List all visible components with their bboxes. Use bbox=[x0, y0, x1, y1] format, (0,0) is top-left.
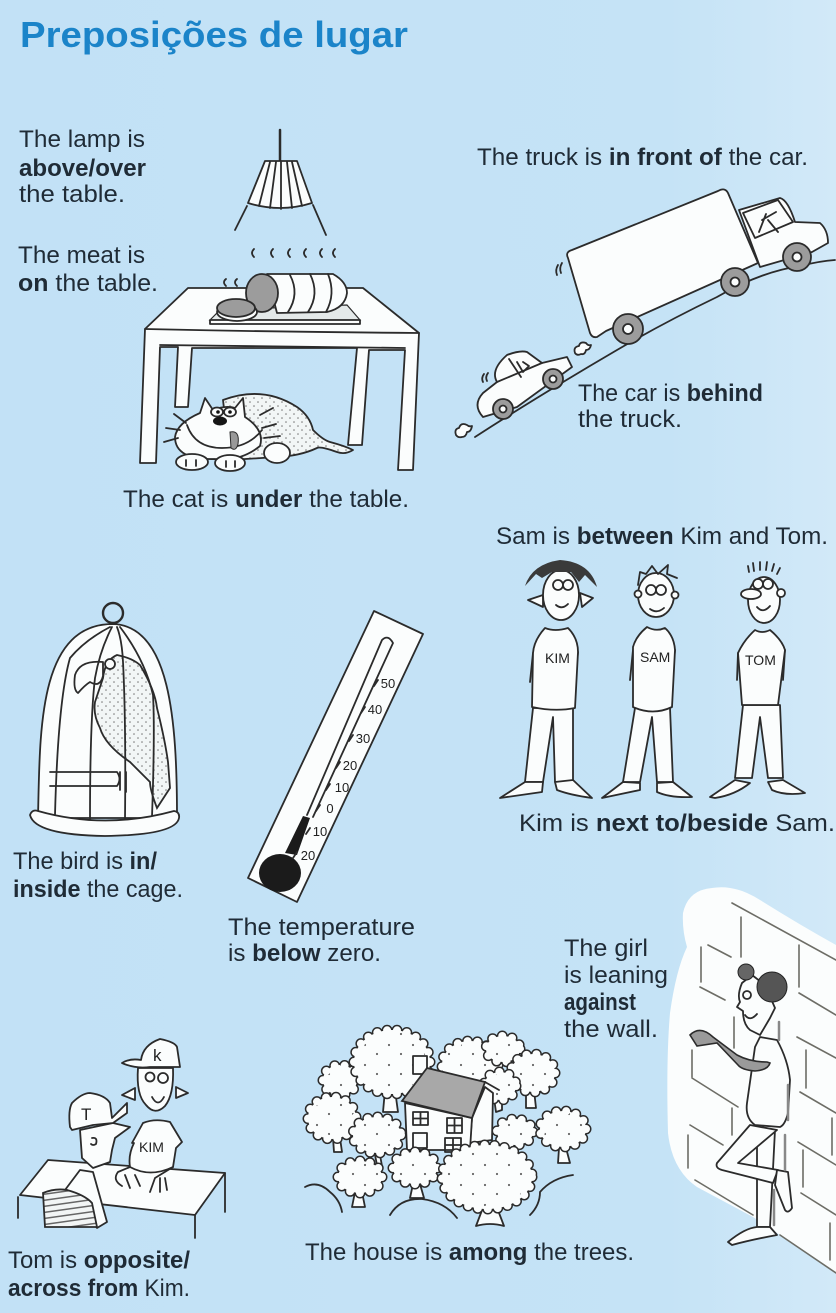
scale numbers bbox=[301, 676, 395, 863]
scale numbers: 20 bbox=[343, 758, 357, 773]
scale numbers: 30 bbox=[356, 731, 370, 746]
illustration: Kim, Sam and Tom bbox=[500, 560, 805, 798]
scale numbers: 10 bbox=[335, 780, 349, 795]
illustration: Tom opposite Kim bbox=[18, 1039, 225, 1238]
figure: Tom: TOM bbox=[745, 652, 776, 668]
icon: exhaust puff of car bbox=[455, 424, 472, 437]
text: car behind the truck: The car is behind bbox=[578, 380, 763, 407]
illustration: thermometer bbox=[248, 611, 423, 902]
text: temperature below zero: The temperature bbox=[228, 914, 415, 941]
figure: Kim: KIM bbox=[545, 650, 570, 666]
scale numbers: 50 bbox=[381, 676, 395, 691]
text: bird inside the cage: inside the cage. bbox=[13, 876, 183, 903]
text: truck in front of the car: The truck is in front of the car. bbox=[477, 144, 808, 171]
figure: Tom: T bbox=[81, 1105, 91, 1124]
trunks behind bbox=[333, 1090, 570, 1170]
text: temperature below zero: is below zero. bbox=[228, 940, 381, 967]
text: bird inside the cage: The bird is in/ bbox=[13, 848, 157, 875]
front trees bbox=[308, 1097, 586, 1226]
back trees bbox=[323, 1030, 555, 1100]
icon: lamp bbox=[235, 130, 326, 235]
icon: meat bbox=[210, 249, 360, 324]
icon: house bbox=[402, 1056, 499, 1152]
text: Tom opposite Kim bbox=[8, 1247, 190, 1302]
icon: table bbox=[20, 1160, 225, 1215]
title: Preposições de lugar bbox=[20, 14, 408, 55]
icon: cat bbox=[164, 394, 353, 471]
text: girl leaning against the wall: against bbox=[564, 989, 636, 1016]
text: Kim next to Sam: Kim is next to/beside Sam. bbox=[519, 810, 835, 837]
figure: Kim bbox=[500, 560, 597, 798]
illustration: girl leaning on wall bbox=[667, 887, 836, 1273]
scale numbers: 10 bbox=[313, 824, 327, 839]
text: meat on the table: on the table. bbox=[18, 270, 158, 297]
text: house among the trees: The house is among the trees. bbox=[305, 1239, 634, 1266]
icon: exhaust puff of truck bbox=[574, 342, 591, 355]
illustration: bird in cage bbox=[30, 603, 179, 836]
text: meat on the table bbox=[18, 242, 158, 297]
text: temperature below zero bbox=[228, 914, 415, 967]
text: girl leaning against the wall: The girl bbox=[564, 935, 648, 962]
figure: Kim: k bbox=[153, 1046, 162, 1065]
figure: Kim: KIM bbox=[139, 1139, 164, 1155]
text: lamp above the table: the table. bbox=[19, 181, 125, 208]
text: lamp above the table bbox=[19, 126, 146, 208]
illustration: house among the trees bbox=[305, 1030, 586, 1226]
text: Tom opposite Kim: Tom is opposite/ bbox=[8, 1247, 190, 1274]
white wall patch bbox=[667, 887, 836, 1273]
scale numbers: 0 bbox=[326, 801, 334, 816]
text: girl leaning against the wall bbox=[564, 935, 668, 1043]
figure: Tom bbox=[43, 1093, 130, 1228]
icon: truck bbox=[556, 189, 828, 344]
text: cat under the table: The cat is under the table. bbox=[123, 486, 409, 513]
text: Tom opposite Kim: across from Kim. bbox=[8, 1275, 190, 1302]
text: car behind the truck bbox=[578, 380, 763, 433]
scale numbers: 20 bbox=[301, 848, 315, 863]
icon: table bbox=[140, 288, 419, 470]
text: lamp above the table: above/over bbox=[19, 155, 146, 182]
illustration: road, truck and car bbox=[455, 189, 835, 437]
figure: girl bbox=[690, 964, 792, 1245]
text: girl leaning against the wall: the wall. bbox=[564, 1016, 658, 1043]
text: bird inside the cage bbox=[13, 848, 183, 903]
bushes bbox=[305, 1175, 573, 1218]
text: Sam between Kim and Tom: Sam is between Kim and Tom. bbox=[496, 523, 828, 550]
icon: car bbox=[478, 351, 572, 419]
figure: Sam bbox=[602, 565, 692, 798]
text: meat on the table: The meat is bbox=[18, 242, 145, 269]
figure: Kim bbox=[116, 1039, 188, 1192]
text: car behind the truck: the truck. bbox=[578, 406, 682, 433]
wall bricks bbox=[688, 903, 836, 1273]
scale numbers: 40 bbox=[368, 702, 382, 717]
figure: Tom bbox=[710, 562, 805, 798]
road line bbox=[475, 260, 835, 437]
illustration: lamp, table, meat and cat bbox=[140, 130, 419, 471]
figure: Sam: SAM bbox=[640, 649, 670, 665]
text: girl leaning against the wall: is leaning bbox=[564, 962, 668, 989]
text: lamp above the table: The lamp is bbox=[19, 126, 145, 153]
